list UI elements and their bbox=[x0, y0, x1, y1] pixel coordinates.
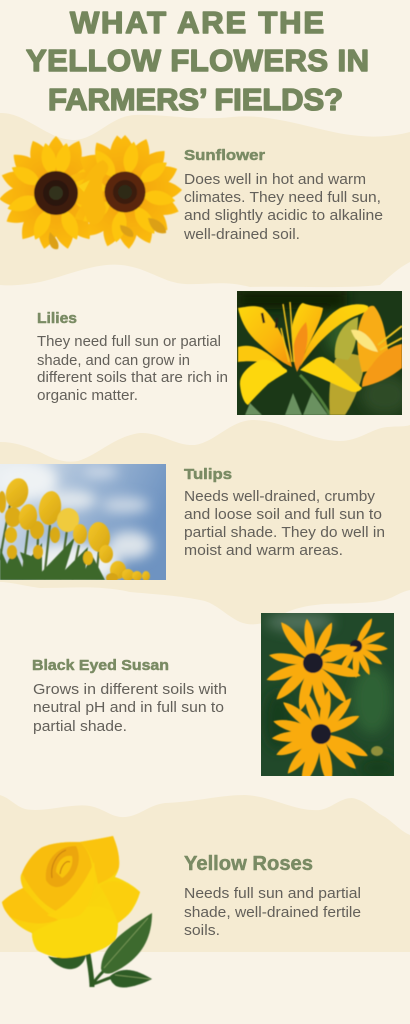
foliage bbox=[245, 392, 328, 415]
text: yellow roses: Needs full sun and partial bbox=[184, 885, 361, 902]
text: black eyed susan: Black Eyed Susan bbox=[32, 657, 169, 674]
bloom centre bbox=[22, 842, 92, 914]
orange throat bbox=[293, 322, 308, 372]
front tulips bbox=[4, 478, 30, 508]
text: tulips: partial shade. They do well in bbox=[184, 524, 385, 541]
text: sunflower: Sunflower bbox=[184, 147, 265, 164]
back tulips bbox=[5, 507, 21, 527]
image: black eyed susan photo bbox=[261, 612, 398, 787]
text: sunflower: Does well in hot and warm bbox=[184, 171, 366, 188]
text: sunflower bbox=[183, 147, 383, 243]
text: sunflower: well-drained soil. bbox=[183, 226, 300, 243]
text: lilies bbox=[37, 310, 228, 404]
title: YELLOW FLOWERS IN bbox=[26, 43, 369, 78]
text: tulips: moist and warm areas. bbox=[184, 542, 343, 559]
title: WHAT ARE THE bbox=[70, 5, 324, 40]
text: lilies: organic matter. bbox=[37, 387, 138, 404]
title: FARMERS’ FIELDS? bbox=[48, 82, 343, 117]
text: lilies: Lilies bbox=[37, 310, 77, 327]
title bbox=[26, 5, 369, 117]
text: sunflower: and slightly acidic to alkaline bbox=[184, 207, 383, 224]
leaves bbox=[101, 913, 152, 974]
text: sunflower: climates. They need full sun, bbox=[184, 189, 381, 206]
sunflower left bbox=[0, 136, 114, 251]
flower C bbox=[324, 617, 388, 678]
text: black eyed susan: Grows in different soils with bbox=[33, 681, 227, 698]
text: yellow roses: shade, well-drained fertile bbox=[184, 904, 361, 921]
flower B bbox=[272, 690, 368, 776]
main lily petals bbox=[238, 346, 283, 367]
second lily bbox=[357, 306, 390, 372]
leaves bbox=[0, 537, 105, 580]
text: lilies: shade, and can grow in bbox=[37, 352, 190, 369]
text: tulips: Needs well-drained, crumby bbox=[184, 488, 376, 505]
wave band: tulips section bbox=[0, 420, 410, 624]
outer petal shading bbox=[2, 888, 58, 923]
drooping petals bbox=[49, 218, 166, 249]
text: yellow roses: Yellow Roses bbox=[184, 853, 313, 875]
rose silhouette bbox=[2, 836, 140, 958]
wave band: yellow roses section bbox=[0, 795, 410, 952]
petal cluster between blooms bbox=[78, 160, 108, 224]
text: tulips bbox=[184, 466, 385, 559]
seed heads bbox=[34, 171, 146, 215]
text: tulips: and loose soil and full sun to bbox=[184, 506, 382, 523]
text: black eyed susan: partial shade. bbox=[33, 718, 127, 735]
buds bbox=[329, 354, 365, 415]
image: lilies photo bbox=[237, 291, 409, 415]
image: yellow rose illustration bbox=[2, 836, 152, 987]
stem bbox=[87, 948, 92, 987]
text: black eyed susan bbox=[32, 657, 227, 735]
text: yellow roses bbox=[184, 853, 361, 939]
text: tulips: Tulips bbox=[184, 466, 232, 483]
text: black eyed susan: neutral pH and in full sun to bbox=[33, 699, 224, 716]
text: lilies: They need full sun or partial bbox=[37, 333, 221, 350]
stems bbox=[0, 505, 99, 580]
image: tulips photo bbox=[0, 460, 166, 587]
wave band: sunflower section bbox=[0, 113, 410, 287]
text: yellow roses: soils. bbox=[184, 922, 220, 939]
image: sunflowers bbox=[0, 134, 182, 251]
text: lilies: different soils that are rich in bbox=[37, 369, 228, 386]
flower A bbox=[265, 618, 362, 712]
sunflower right bbox=[67, 134, 182, 250]
